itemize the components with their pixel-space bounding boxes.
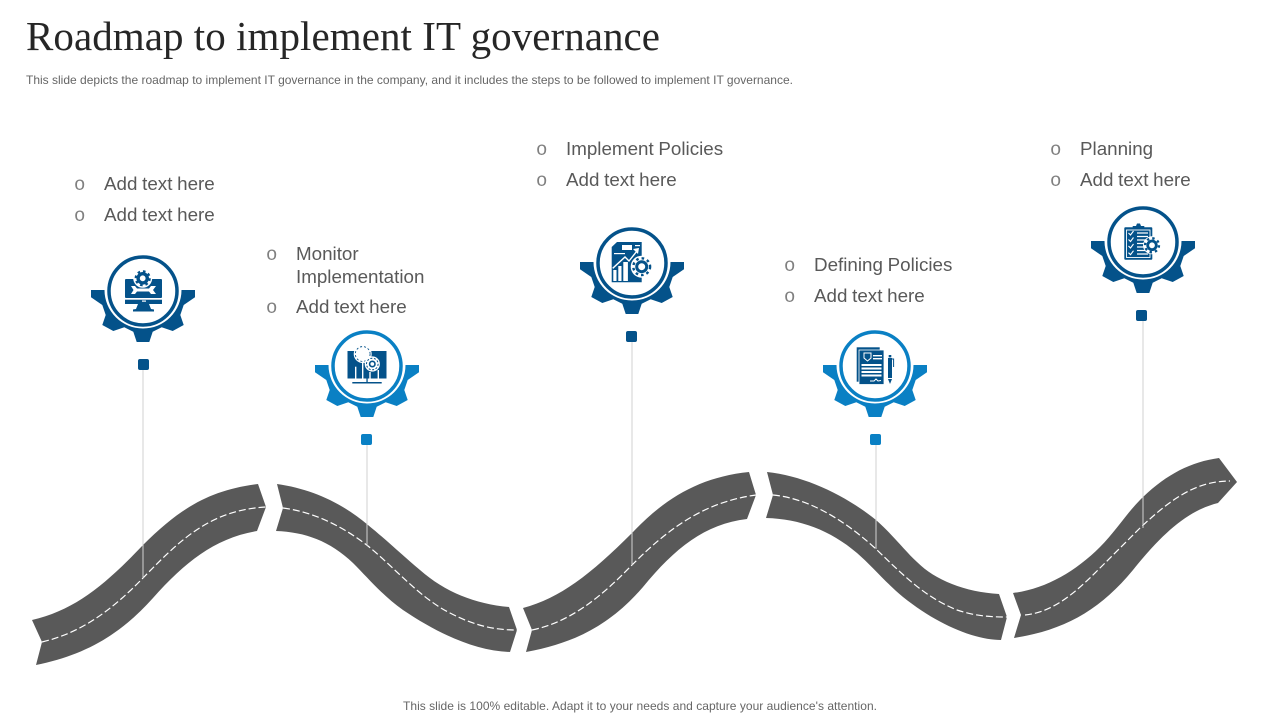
text block 2: Add text here (296, 296, 407, 317)
text block 4 (784, 254, 952, 308)
milestone 2: monitor implementation (315, 332, 419, 546)
gear badge 1 (91, 257, 195, 342)
text block 3: Add text here (566, 169, 677, 190)
milestone 5: planning (1091, 208, 1195, 528)
text block 2: Implementation (296, 266, 424, 287)
text block 1: Add text here (104, 204, 215, 225)
text block 3 (536, 138, 723, 192)
node 3 (626, 331, 637, 342)
milestone 4: defining policies (823, 332, 927, 549)
icon: report with growth arrow and gear (612, 242, 653, 282)
road: winding five-segment path (32, 458, 1237, 665)
text block 5: o (1050, 170, 1061, 192)
text block 4: Defining Policies (814, 254, 952, 275)
text block 5: Planning (1080, 138, 1153, 159)
node 4 (870, 434, 881, 445)
road segment 4 (766, 472, 1007, 640)
text block 2 (266, 243, 424, 319)
icon: checklist clipboard with gear (1124, 224, 1161, 260)
road segment 2 (276, 484, 517, 652)
text block 4: o (784, 255, 795, 277)
text block 3: Implement Policies (566, 138, 723, 159)
text block 4: Add text here (814, 285, 925, 306)
node 2 (361, 434, 372, 445)
title: Roadmap to implement IT governance (26, 13, 660, 59)
text block 2: o (266, 297, 277, 319)
text block 3: o (536, 139, 547, 161)
road segment 5 with arrow end (1013, 458, 1237, 638)
text block 1: o (74, 174, 85, 196)
connector line 1 (142, 370, 144, 578)
node 1 (138, 359, 149, 370)
text block 2: Monitor (296, 243, 359, 264)
road segment 3 (523, 472, 756, 652)
gear badge 3 (580, 229, 684, 314)
icon: chart screen with gears (348, 345, 386, 384)
text block 1: o (74, 205, 85, 227)
text block 5 (1050, 138, 1191, 192)
road segment 1 (32, 484, 266, 665)
text block 5: o (1050, 139, 1061, 161)
milestone 1: monitor maintenance (91, 257, 195, 578)
icon: monitor with wrench and gear (125, 269, 162, 312)
text block 1 (74, 173, 215, 227)
text block 1: Add text here (104, 173, 215, 194)
text block 4: o (784, 286, 795, 308)
milestone 3: implement policies (580, 229, 684, 565)
gear badge 5 (1091, 208, 1195, 293)
gear badge 4 (823, 332, 927, 417)
subtitle: This slide depicts the roadmap to implement IT governance in the company, and it includes the steps to be followed to implement IT governance. (26, 73, 793, 87)
connector line 3 (631, 342, 633, 565)
connector line 5 (1142, 321, 1144, 528)
text block 3: o (536, 170, 547, 192)
text block 5: Add text here (1080, 169, 1191, 190)
footer note: This slide is 100% editable. Adapt it to your needs and capture your audience's attention. (403, 699, 877, 713)
connector line 2 (366, 445, 368, 546)
node 5 (1136, 310, 1147, 321)
text block 2: o (266, 244, 277, 266)
connector line 4 (875, 445, 877, 549)
gear badge 2 (315, 332, 419, 417)
icon: policy document and pen (857, 347, 894, 384)
